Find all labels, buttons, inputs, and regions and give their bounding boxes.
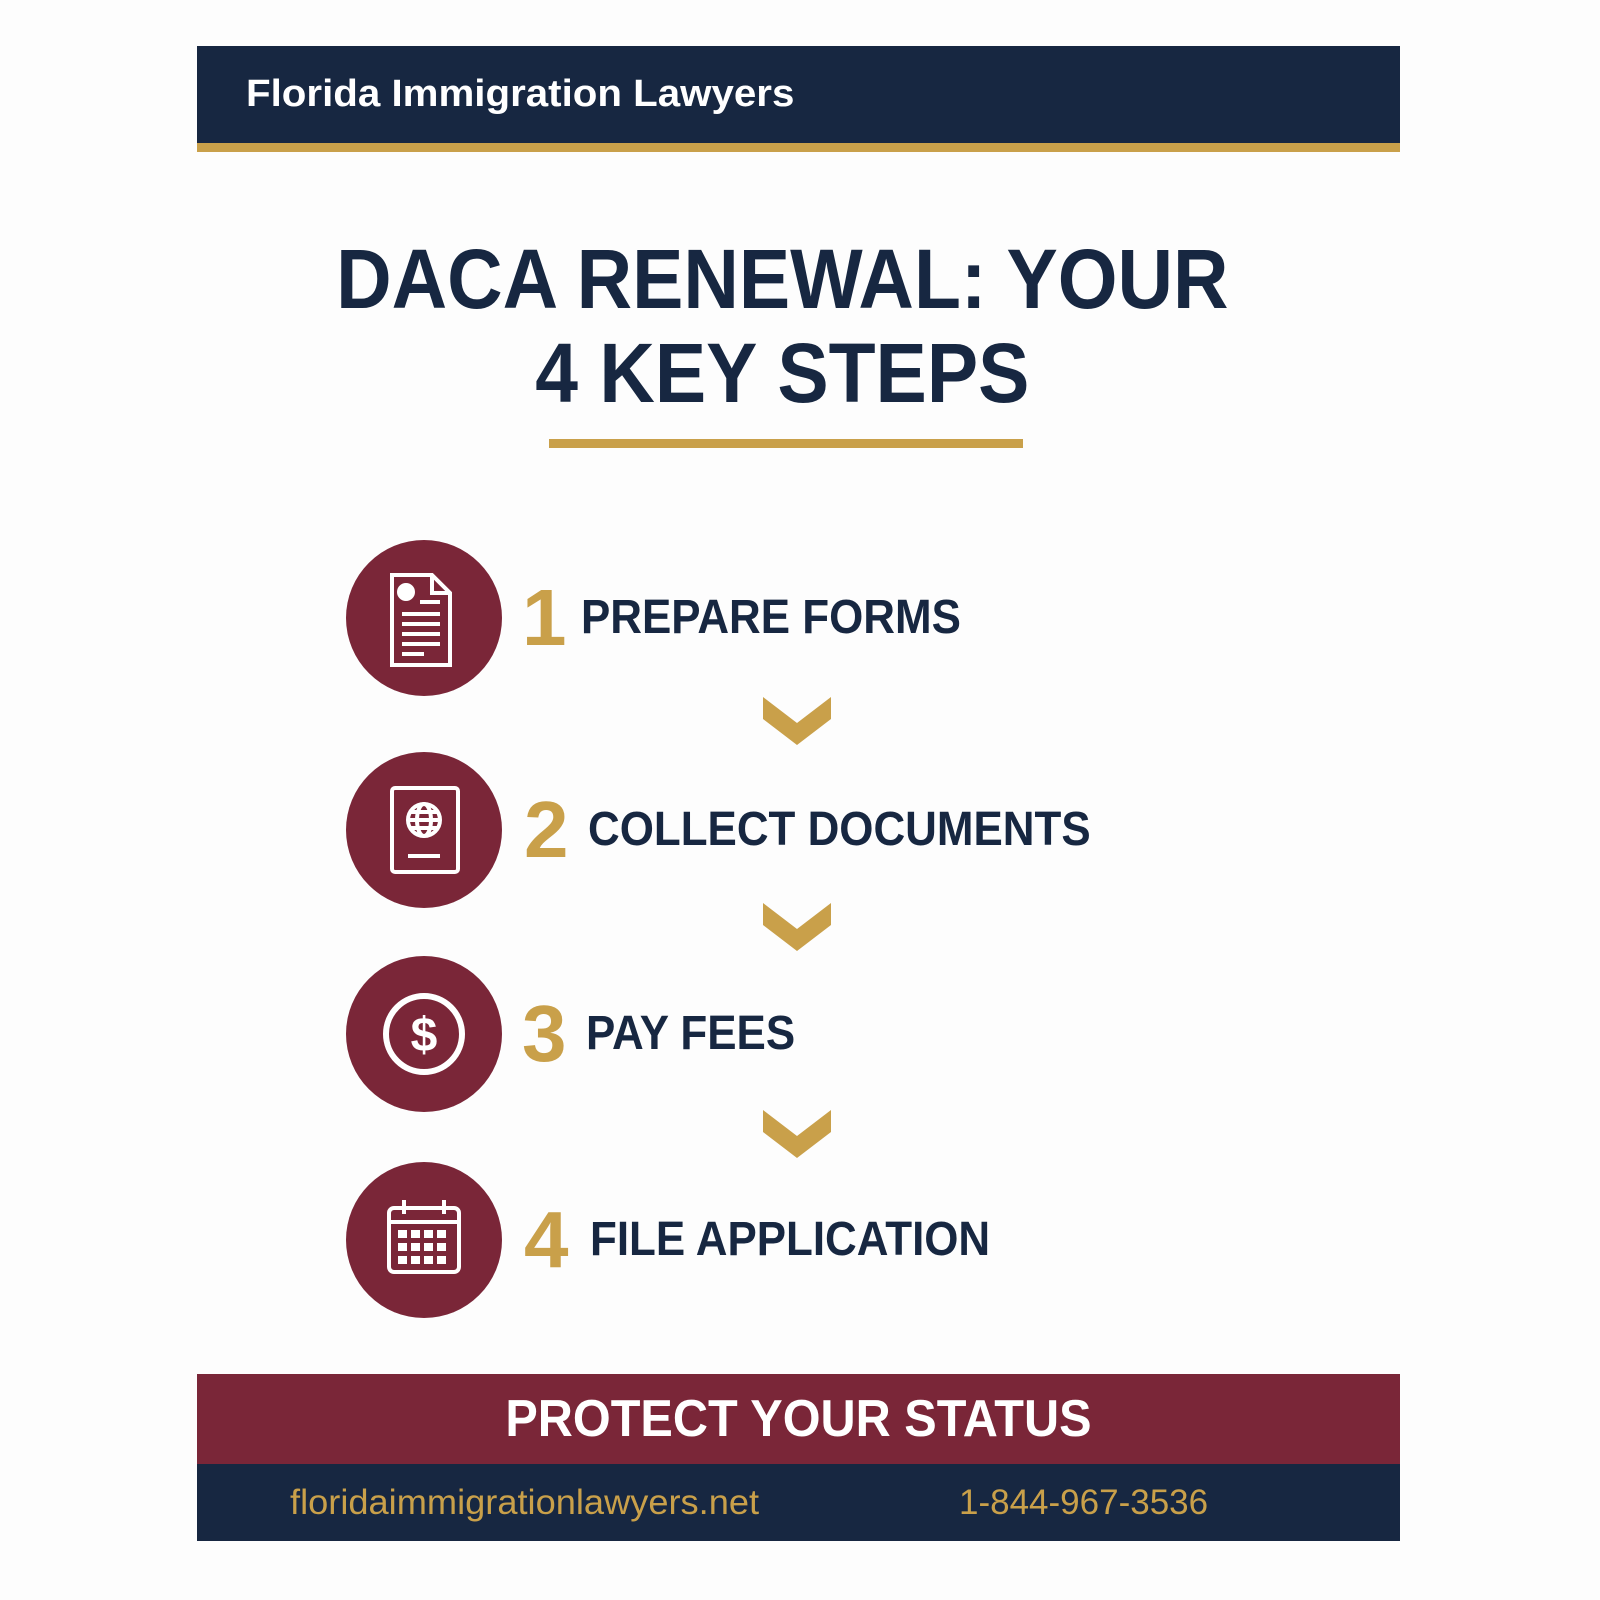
step 3: [346, 956, 795, 1112]
title underline: [549, 439, 1023, 448]
number 1: 1: [522, 573, 566, 662]
arrow 1: [763, 697, 831, 745]
label: PAY FEES: [586, 1007, 795, 1060]
title: 4 KEY STEPS: [535, 326, 1029, 420]
icon: dollar: $: [411, 1009, 438, 1062]
label: FILE APPLICATION: [590, 1213, 990, 1266]
title: [336, 232, 1229, 420]
icon: document: [346, 540, 502, 696]
banner headline: PROTECT YOUR STATUS: [505, 1390, 1092, 1448]
header bar: [197, 46, 1400, 152]
step 2: [346, 752, 1091, 908]
step 4: [346, 1162, 990, 1318]
phone: 1-844-967-3536: [959, 1483, 1208, 1522]
number 2: 2: [524, 785, 568, 874]
title: DACA RENEWAL: YOUR: [336, 232, 1229, 326]
footer banner: [197, 1374, 1400, 1541]
icon: dollar: [346, 956, 502, 1112]
contact bar: [197, 1464, 1400, 1541]
label: COLLECT DOCUMENTS: [588, 803, 1091, 856]
banner headline: [197, 1374, 1400, 1464]
number 4: 4: [524, 1195, 568, 1284]
arrow 2: [763, 903, 831, 951]
arrow 3: [763, 1110, 831, 1158]
website: floridaimmigrationlawyers.net: [290, 1483, 759, 1522]
label: PREPARE FORMS: [581, 591, 961, 644]
header text: Florida Immigration Lawyers: [246, 73, 794, 115]
icon: passport: [346, 752, 502, 908]
icon: calendar: [346, 1162, 502, 1318]
number 3: 3: [522, 989, 566, 1078]
step 1: [346, 540, 961, 696]
